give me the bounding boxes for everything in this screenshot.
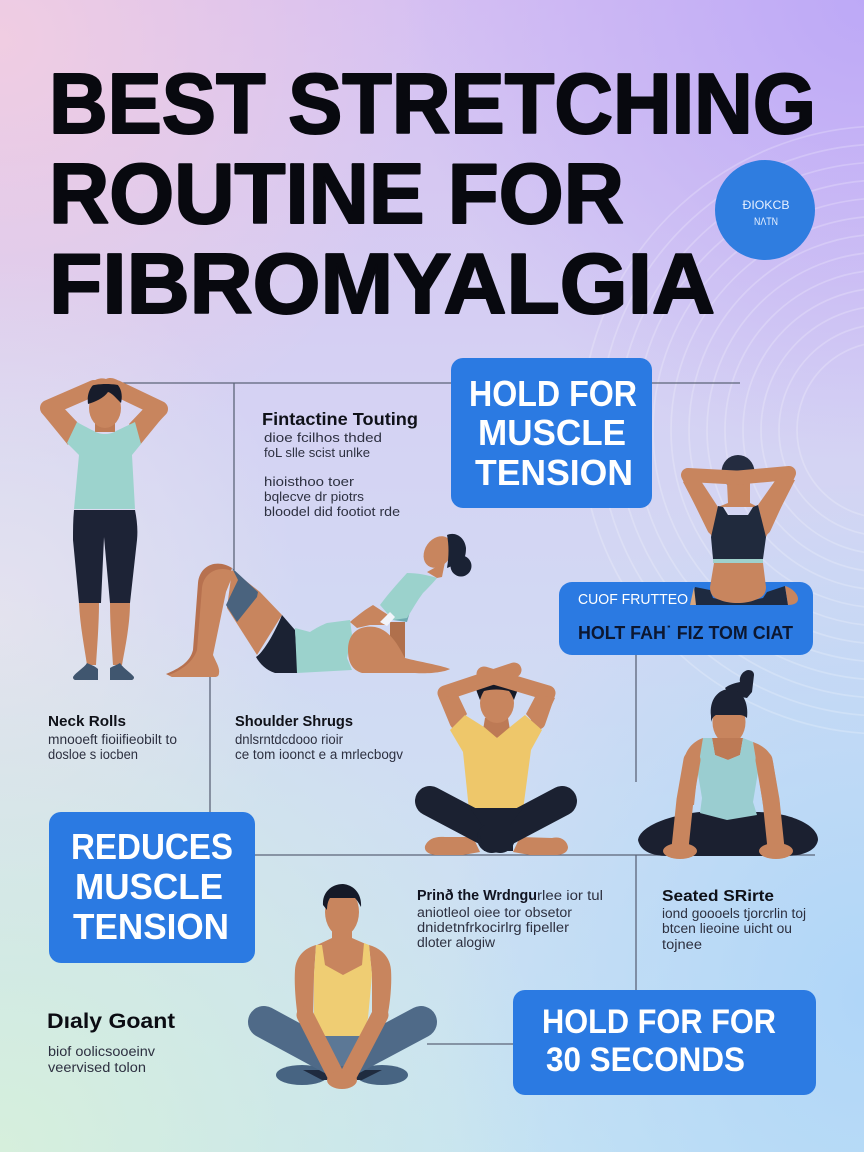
text block: Shoulder Shrugs: ce tom ioonct e a mrlecbogv — [235, 747, 403, 762]
callout: hold for 30 seconds: 30 SECONDS — [546, 1041, 745, 1079]
text block: Print the Wridngurlee: Prinð the Wrdngu — [417, 888, 537, 904]
text block: Neck Rolls — [48, 713, 177, 762]
badge circle: ÐIOKCB — [742, 198, 790, 212]
title: FIBROMYALGIA — [49, 237, 715, 332]
badge circle — [715, 160, 815, 260]
text block: Dialy Goant: veervised tolon — [48, 1060, 146, 1075]
figure: seated woman seen from behind — [683, 455, 798, 605]
callout: hold for 30 seconds: HOLD FOR FOR — [542, 1003, 776, 1041]
title: ROUTINE FOR — [49, 147, 624, 242]
title — [49, 57, 816, 332]
callout: reduces muscle tension — [49, 812, 255, 963]
callout: holt fah fiz tom ciat: CUOF FRUTTEO — [578, 591, 688, 608]
text block: Neck Rolls: mnooeft fioiifieobilt to — [48, 732, 177, 747]
text block: Fintactine Touting: bloodel did footiot rde — [264, 504, 400, 519]
callout: reduces muscle tension: MUSCLE — [75, 866, 223, 907]
badge circle: NΛTN — [754, 216, 778, 228]
callout: reduces muscle tension: TENSION — [73, 906, 229, 947]
text block: Print the Wridngurlee: dnidetnfrkocirlrg fipeller — [417, 920, 570, 935]
callout: holt fah fiz tom ciat — [559, 582, 813, 655]
callout: hold for muscle tension: HOLD FOR — [469, 373, 637, 414]
figure: reclining woman with knee raised — [166, 531, 472, 677]
text block: Print the Wridngurlee: aniotleol oiee tor obsetor — [417, 905, 573, 920]
figure: seated man, yellow tank, butterfly pose — [264, 884, 421, 1089]
text block: Fintactine Touting — [262, 409, 418, 519]
text block: Fintactine Touting: foL slle scist unlke — [264, 445, 370, 460]
text block: Dialy Goant — [47, 1010, 175, 1075]
text block: Shoulder Shrugs — [235, 713, 403, 762]
callout: hold for muscle tension: TENSION — [475, 452, 633, 493]
text block: Fintactine Touting: bqlecve dr piotrs — [264, 489, 365, 504]
text block: Fintactine Touting: Fintactine Touting — [262, 409, 418, 429]
figure: seated woman with top bun — [638, 670, 818, 859]
figure: seated man, yellow shirt, hands on head — [425, 670, 568, 855]
text block: Seated Shirte: tojnee — [662, 937, 702, 952]
callout: holt fah fiz tom ciat: HOLT FAH˙ FIZ TOM CIAT — [578, 623, 793, 643]
text block: Print the Wridngurlee: dloter alogiw — [417, 935, 495, 950]
text block: Seated Shirte: Seated SRirte — [662, 888, 774, 905]
callout: reduces muscle tension: REDUCES — [71, 826, 233, 867]
text block: Print the Wridngurlee — [417, 888, 603, 950]
callout: hold for muscle tension: MUSCLE — [478, 412, 626, 453]
text block: Seated Shirte: btcen lieoine uicht ou — [662, 921, 792, 936]
text block: Seated Shirte: iond goooels tjorcrlin toj — [662, 906, 806, 921]
text block: Neck Rolls: Neck Rolls — [48, 713, 126, 730]
callout: hold for 30 seconds — [513, 990, 816, 1095]
figure: standing woman, hands behind head — [41, 378, 167, 680]
callout: hold for muscle tension — [451, 358, 652, 508]
text block: Fintactine Touting: hioisthoo toer — [264, 474, 355, 489]
text block: Shoulder Shrugs: dnlsrntdcdooo rioir — [235, 732, 343, 747]
text block: Shoulder Shrugs: Shoulder Shrugs — [235, 713, 353, 730]
text block: Print the Wridngurlee: rlee ior tul — [537, 888, 603, 903]
title: BEST STRETCHING — [49, 57, 816, 152]
text block: Seated Shirte — [662, 888, 806, 952]
text block: Dialy Goant: biof oolicsooeinv — [48, 1044, 155, 1059]
text block: Fintactine Touting: dioe fcilhos thded — [264, 430, 382, 445]
text block: Dialy Goant: Dıaly Goant — [47, 1010, 175, 1033]
text block: Neck Rolls: dosloe s iocben — [48, 747, 138, 762]
